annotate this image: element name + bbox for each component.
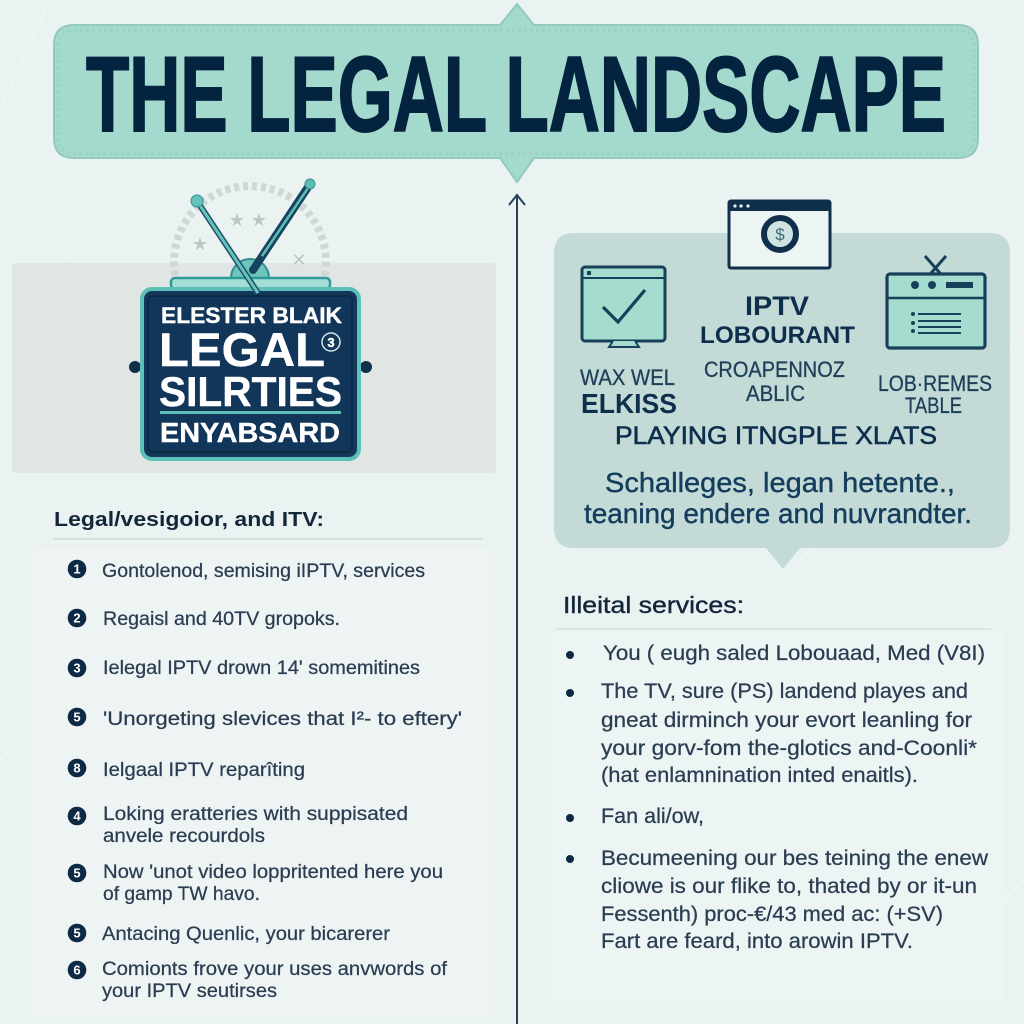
bullet 4: Fessenth) proc-€/43 med ac: (+SV) [601,903,943,926]
item 8: 5 [73,926,81,940]
callout labels: IPTV [745,291,809,321]
callout labels: teaning endere and nuvrandter. [584,498,972,529]
right list heading: Illeital services: [563,592,744,618]
bullet 4: Becumeening our bes teining the enew [601,847,989,870]
left list heading: Legal/vesigoior, and ITV: [54,509,324,531]
item 6 [68,804,408,847]
panel: illegal services list [550,632,1005,1002]
stars and arc seal [174,186,326,338]
grey band behind TV [12,263,496,473]
item 6: anvele recourdols [103,826,265,847]
item 4: 5 [73,710,81,724]
icon: set-top box [887,256,985,348]
callout labels: WAX WEL [580,365,675,390]
callout labels: Schalleges, legan hetente., [605,467,955,498]
bullet 4: cliowe is our flike to, thated by or it-un [601,875,977,898]
tv text: LEGAL [159,323,325,376]
bullet 4 [566,847,989,953]
bullet 3: Fan ali/ow, [601,805,704,828]
item 7: 5 [73,866,81,880]
title banner [54,4,978,182]
callout labels [580,291,992,529]
center arrow [509,195,525,1024]
antenna right [253,179,315,270]
item 1: 1 [73,562,81,576]
bullet 2: gneat dirminch your evort leanling for [601,709,972,732]
item 7: Now 'unot video loppritented here you [103,862,443,883]
icon: browser window [729,201,830,268]
item 3: Ielegal IPTV drown 14' somemitines [103,658,420,679]
icon: browser window: $ [775,225,785,244]
bullet 2 [566,680,977,787]
item 5: Ielgaal IPTV reparîting [103,760,305,781]
item 3: 3 [73,660,81,676]
stars and arc seal: ★ [251,210,267,230]
tv text [159,303,342,448]
item 4: 'Unorgeting slevices that I²- to eftery' [103,709,462,730]
tv text: ELESTER BLAIK [161,303,342,328]
item 7: of gamp TW havo. [103,884,260,905]
item 9: your IPTV seutirses [102,981,277,1002]
item 8: Antacing Quenlic, your bicarerer [102,924,391,945]
bullet 1: You ( eugh saled Lobouaad, Med (V8I) [603,642,985,665]
antenna left [191,195,258,293]
callout labels: ELKISS [581,388,677,419]
antenna top bar [171,278,330,289]
item 9 [68,959,448,1002]
tv text: 3 [327,335,335,350]
bullet 4: Fart are feard, into arowin IPTV. [601,930,913,953]
item 5: 8 [73,760,81,776]
stars and arc seal: ★ [192,234,208,254]
item 6: 4 [73,808,81,824]
stars and arc seal: ✕ [291,250,307,270]
panel: IPTV callout [554,201,1010,569]
item 1: Gontolenod, semising iIPTV, services [102,561,425,582]
item 9: Comionts frove your uses anvwords of [102,959,448,980]
callout labels: PLAYING ITNGPLE XLATS [615,422,937,450]
bullet 2: The TV, sure (PS) landend playes and [601,680,968,703]
antenna base [231,259,269,297]
item 2: Regaisl and 40TV gropoks. [103,609,340,630]
callout labels: LOB·REMES [878,371,992,396]
panel: legal services list [32,547,490,1018]
item 7 [68,862,443,905]
item 9: 6 [73,962,81,978]
stars and arc seal: ★ [229,210,245,230]
tv text: ENYABSARD [160,417,340,448]
bullet 2: (hat enlamnination inted enaitls). [601,764,918,787]
side knobs [129,361,372,373]
bullet 2: your gorv-fom the-glotics and-Coonli* [601,737,977,760]
icon: television with legal badge [129,179,372,459]
tv text: SILRTIES [159,368,342,415]
icon: monitor with check [582,267,665,347]
callout labels: CROAPENNOZ [704,357,845,382]
callout labels: LOBOURANT [700,322,855,349]
callout labels: TABLE [905,393,962,418]
callout labels: ABLIC [746,381,805,406]
tv body [142,289,359,459]
item 2: 2 [73,610,81,626]
item 6: Loking eratteries with suppisated [103,804,408,825]
